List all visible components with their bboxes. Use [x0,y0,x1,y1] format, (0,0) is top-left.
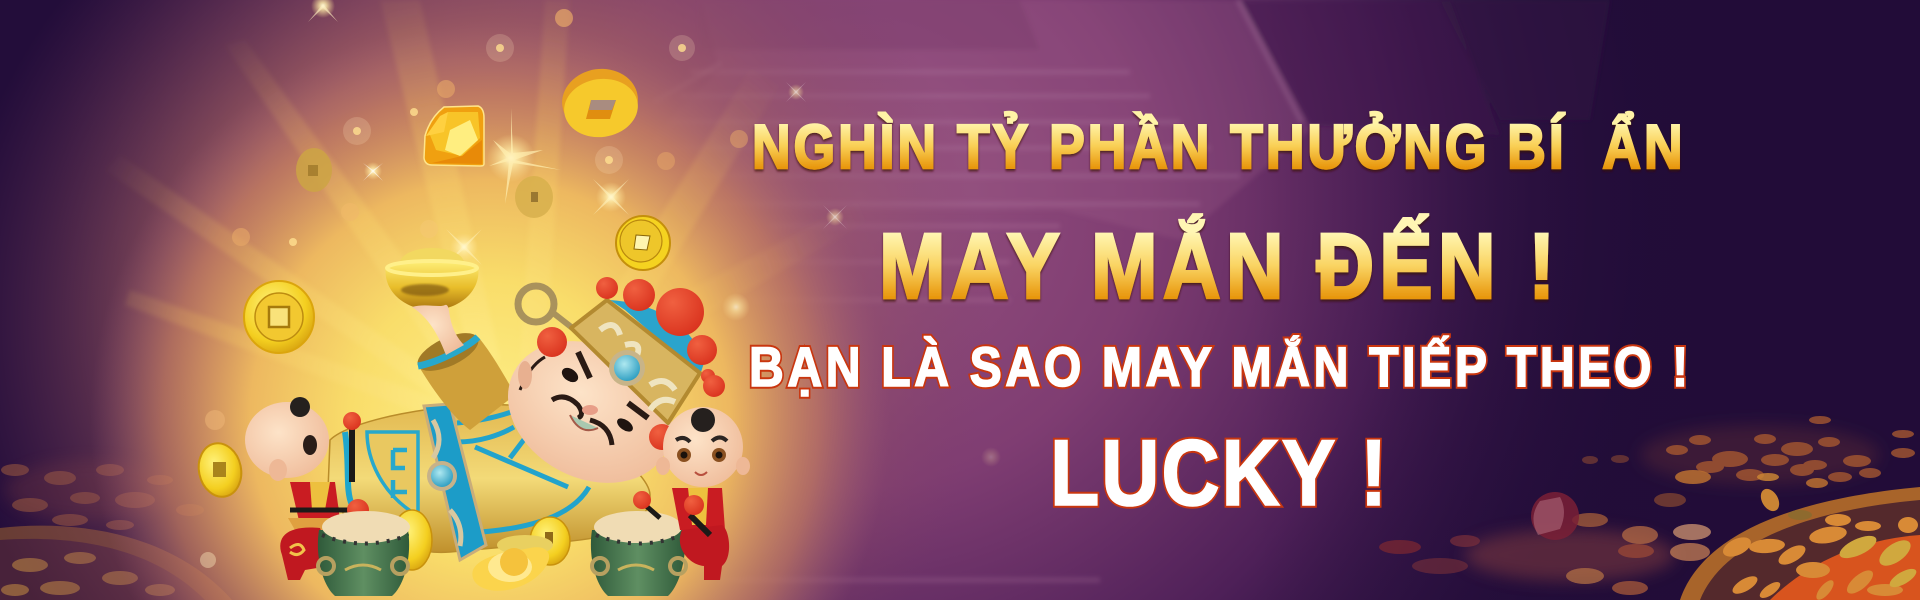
left treasure coins [0,460,232,600]
heading: lucky: LUCKY ! [1050,420,1387,525]
raised arm [412,305,515,430]
golden glow [0,0,1000,600]
left drummer boy [245,397,369,580]
icon: coin left [244,281,314,353]
belt [424,404,486,560]
gold coin behind drum [392,510,432,570]
heading: lucky: LUCKY ! [1050,420,1387,525]
light rays [105,0,870,420]
blue trim [457,403,589,533]
gold coin bottom [530,517,570,565]
right drummer boy [633,407,750,580]
icon: square-hole coin [558,64,642,142]
icon: faded coins [296,148,553,218]
icon: coin right [616,216,670,270]
icon: gold ingot top [386,248,478,310]
icon: coin far left [194,439,246,501]
subheading: white outlined line: BẠN LÀ SAO MAY MẮN TIẾP THEO ! [749,336,1688,399]
subheading: white outlined line: BẠN LÀ SAO MAY MẮN TIẾP THEO ! [749,336,1688,399]
bokeh lights [200,9,748,568]
sparkles [308,0,1001,467]
heading: top gold line: NGHÌN TỶ PHẦN THƯỞNG BÍ ẨN [752,112,1683,182]
background staircase [620,0,1610,580]
heading: main gold line: MAY MẮN ĐẾN ! [879,214,1555,318]
crown [518,277,725,450]
left drum [318,511,410,596]
robe body [328,405,650,552]
right drum [591,511,686,596]
icon: gold gem [424,106,484,166]
warm haze [0,0,1100,600]
god of wealth character [328,277,725,560]
right treasure coins [1379,416,1920,600]
face [483,313,697,511]
gold ingot bottom [472,535,553,591]
